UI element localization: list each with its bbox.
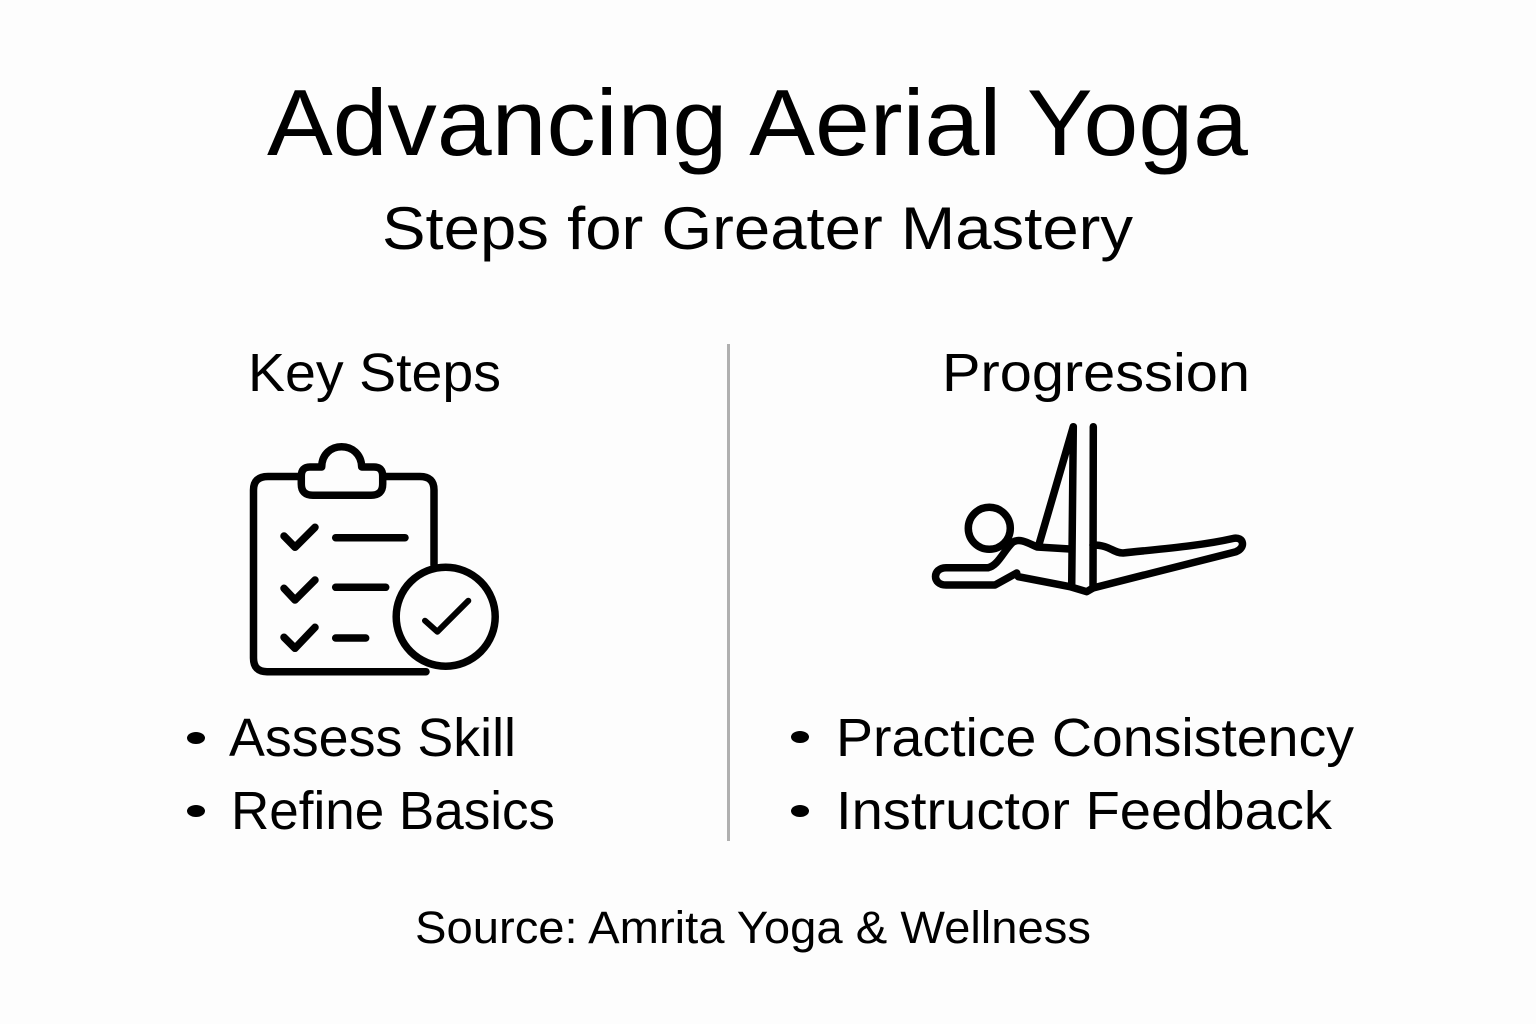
panel: progression (791, 343, 1354, 841)
bullet: instructor feedback: Instructor Feedback (836, 781, 1333, 841)
icon: aerial yoga pose (936, 427, 1242, 592)
title: Advancing Aerial Yoga (267, 70, 1249, 175)
panel: key steps (187, 343, 555, 841)
bullet: assess skill: Assess Skill (229, 708, 516, 768)
heading: key steps: Key Steps (248, 343, 501, 403)
bullet list: progression (791, 708, 1354, 841)
source note: Source: Amrita Yoga & Wellness (415, 902, 1091, 953)
heading: progression: Progression (942, 343, 1250, 403)
bullet: refine basics: Refine Basics (231, 781, 555, 841)
icon: clipboard checklist (254, 447, 495, 672)
subtitle: Steps for Greater Mastery (382, 195, 1133, 262)
bullet: practice consistency: Practice Consistency (836, 708, 1354, 768)
bullet list: key steps (187, 708, 555, 841)
